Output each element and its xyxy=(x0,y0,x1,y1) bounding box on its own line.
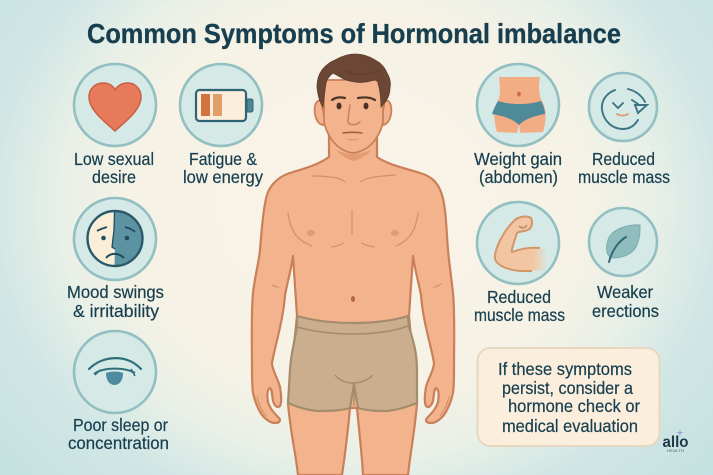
label: desire xyxy=(92,167,136,187)
head xyxy=(315,54,391,153)
label: Mood swings xyxy=(67,282,164,302)
logo: allo health: allo xyxy=(662,434,689,451)
symptom: reduced muscle mass, cycle face xyxy=(578,73,670,187)
nose xyxy=(348,105,360,125)
title: Common Symptoms of Hormonal imbalance xyxy=(87,18,621,49)
callout xyxy=(478,348,660,446)
eyebrows xyxy=(332,97,345,100)
callout: persist, consider a xyxy=(502,378,633,398)
central male figure xyxy=(252,54,454,475)
logo: allo health xyxy=(662,429,689,453)
callout: medical evaluation xyxy=(502,416,638,436)
label xyxy=(592,282,659,321)
icon: battery xyxy=(196,90,253,121)
eyes xyxy=(336,103,342,109)
symptom: mood swings xyxy=(67,198,164,321)
callout: If these symptoms xyxy=(498,359,632,379)
nipples xyxy=(307,230,315,236)
icon: leaf xyxy=(607,225,640,262)
label: Poor sleep or xyxy=(73,415,168,435)
label: Weaker xyxy=(597,282,653,302)
label: Reduced xyxy=(592,149,655,169)
symptom: poor sleep xyxy=(68,331,169,453)
label xyxy=(578,149,670,187)
label: Low sexual xyxy=(74,149,154,169)
label: Fatigue & xyxy=(189,149,257,169)
icon: abdomen xyxy=(492,77,546,133)
label xyxy=(474,287,565,325)
face xyxy=(324,80,383,153)
label: erections xyxy=(592,301,659,321)
label: & irritability xyxy=(73,301,159,321)
label: (abdomen) xyxy=(479,167,558,187)
label: Reduced xyxy=(487,287,551,307)
callout: hormone check or xyxy=(508,396,640,416)
icon: flexed arm xyxy=(495,217,548,271)
label xyxy=(474,149,562,187)
label xyxy=(183,149,263,187)
label xyxy=(67,282,164,321)
icon: circular arrows face xyxy=(602,89,647,129)
hair xyxy=(317,54,390,107)
symptom: fatigue and low energy xyxy=(180,64,263,187)
navel xyxy=(351,296,355,302)
shorts xyxy=(288,316,417,411)
logo: allo health: HEALTH xyxy=(667,449,685,453)
icon: half sad face xyxy=(87,211,142,266)
symptom: reduced muscle mass, arm xyxy=(474,202,565,325)
icon: sleepy eye xyxy=(89,358,141,385)
label: muscle mass xyxy=(578,167,670,187)
label: muscle mass xyxy=(474,305,565,325)
label xyxy=(68,415,169,453)
chest lines xyxy=(257,175,449,416)
ears xyxy=(315,101,326,125)
label xyxy=(74,149,154,187)
neck shadow xyxy=(336,150,372,161)
symptom: weaker erections xyxy=(589,208,659,321)
label: concentration xyxy=(68,433,169,453)
label: Weight gain xyxy=(474,149,562,169)
label: low energy xyxy=(183,167,263,187)
hair shade xyxy=(345,70,380,74)
symptom: weight gain abdomen xyxy=(474,64,562,187)
body xyxy=(252,135,454,475)
mouth xyxy=(343,131,362,134)
icon: heart xyxy=(89,83,141,131)
symptom: low sexual desire xyxy=(74,64,156,187)
